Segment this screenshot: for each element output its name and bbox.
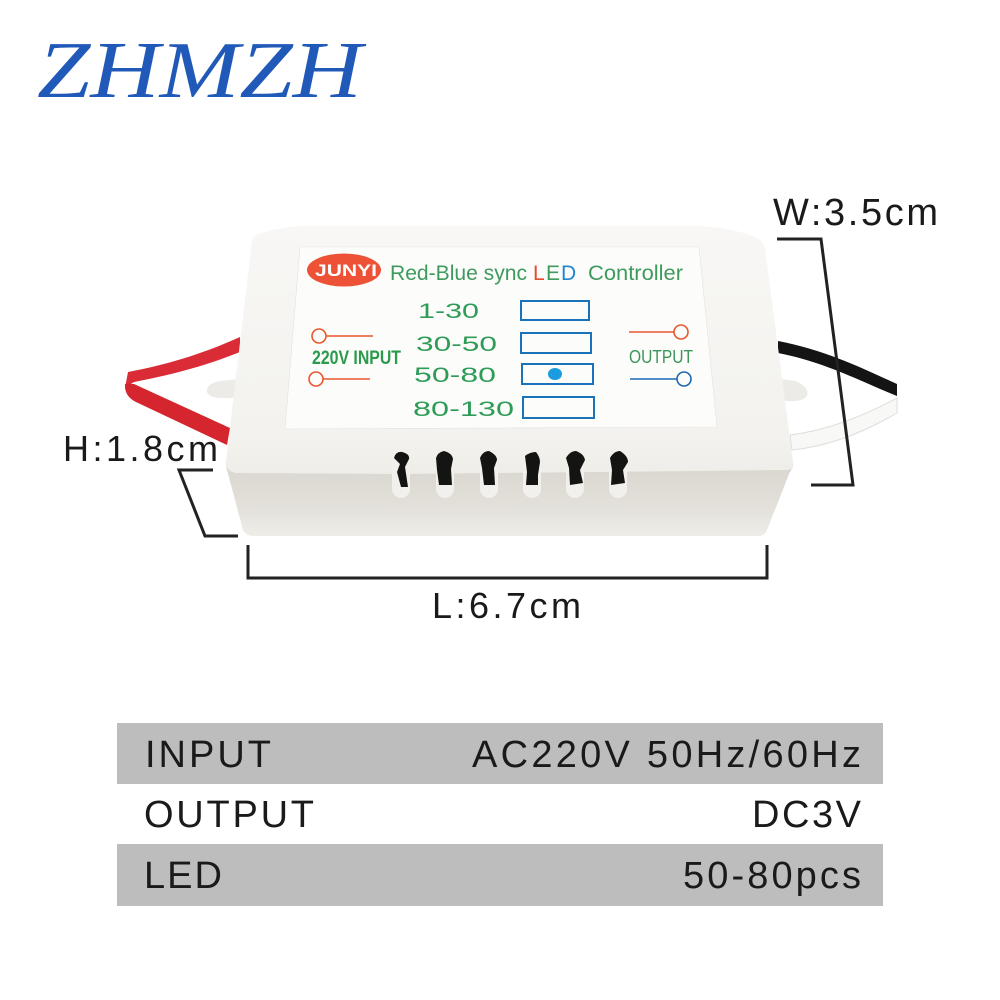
label: LED coloured letters: E [546, 262, 560, 285]
dimension: length [248, 545, 767, 626]
row: output: DC3V [752, 794, 862, 836]
product label [285, 247, 717, 429]
label: product name: Red-Blue sync [390, 262, 527, 285]
label: selection boxes [521, 301, 594, 418]
dimension: height [63, 428, 238, 536]
row: input [117, 723, 883, 784]
spec table [117, 723, 883, 906]
label: LED coloured letters: D [561, 262, 576, 285]
dimension: length: L:6.7cm [432, 585, 581, 626]
vent slots [392, 448, 628, 498]
body: front face [226, 464, 793, 536]
label: LED coloured letters: L [533, 262, 545, 285]
row: input: AC220V 50Hz/60Hz [472, 734, 861, 776]
label: range 50-80: 50-80 [414, 364, 496, 387]
row: LED: 50-80pcs [683, 855, 861, 897]
label: input terminals [309, 329, 373, 386]
label: JUNYI badge: JUNYI [315, 261, 377, 280]
row: LED [117, 844, 883, 906]
wires: red input wires [125, 337, 240, 445]
title: ZHMZH brand logo: ZHMZH [37, 27, 367, 115]
label: OUTPUT: OUTPUT [629, 347, 693, 367]
controller body [226, 226, 793, 536]
label: selected dot [548, 368, 562, 380]
label: range 80-130: 80-130 [413, 398, 514, 421]
wires: black and white output wires [778, 341, 897, 450]
dimension: width: W:3.5cm [773, 192, 938, 234]
label: output terminal red [629, 325, 688, 339]
label: output terminal blue [630, 372, 691, 386]
label: background [285, 247, 717, 429]
mounting tabs [207, 379, 808, 401]
label: 220V INPUT: 220V INPUT [312, 348, 401, 369]
row: input: INPUT [145, 734, 271, 776]
row: output [144, 794, 862, 836]
row: output: OUTPUT [144, 794, 314, 836]
label: Controller word: Controller [588, 262, 683, 285]
row: LED: LED [144, 855, 222, 897]
body: top face [226, 226, 793, 476]
label: range 30-50: 30-50 [416, 333, 497, 356]
label: range 1-30: 1-30 [418, 300, 479, 323]
dimension: width [773, 192, 938, 485]
label: JUNYI badge [307, 254, 381, 286]
dimension: height: H:1.8cm [63, 428, 218, 469]
